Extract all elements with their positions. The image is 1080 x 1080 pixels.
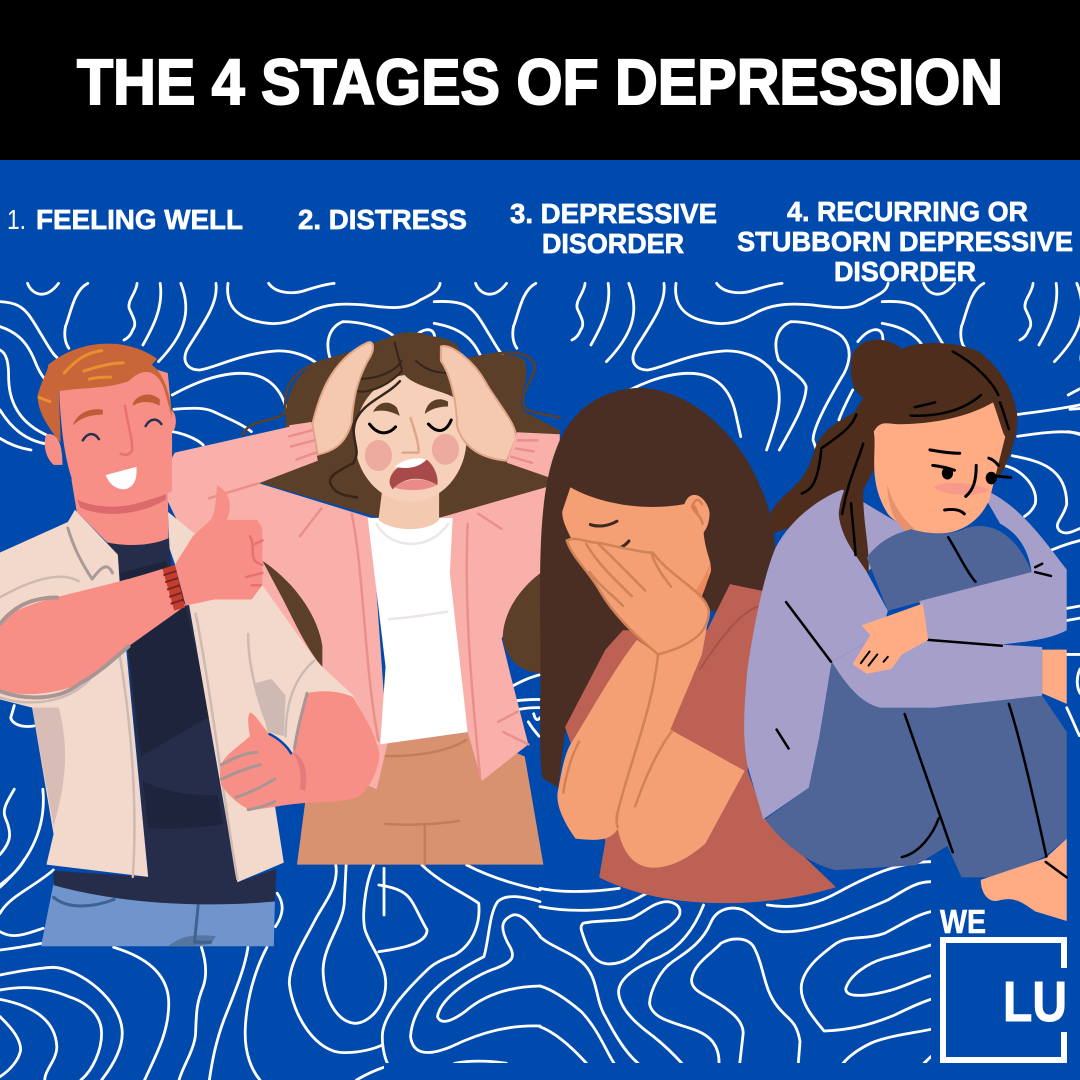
- background contour lines: [0, 283, 1080, 1080]
- blush: [933, 483, 990, 495]
- front hair strand: [839, 436, 884, 574]
- cardigan: [167, 422, 387, 789]
- hair: [770, 340, 1018, 533]
- logo frame: [943, 940, 1064, 1060]
- watch: [162, 565, 185, 610]
- brows: [73, 395, 160, 425]
- sweater body: [744, 490, 916, 819]
- header band: [0, 0, 1080, 160]
- eye marks: [590, 521, 629, 548]
- logo: We Lu: [940, 903, 1067, 1060]
- thumbs-up fist: [175, 485, 262, 606]
- hands on head: [312, 342, 516, 461]
- loose hair strands: [243, 353, 560, 434]
- foot: [981, 839, 1067, 921]
- left forearm: [557, 640, 658, 840]
- neck and face: [378, 491, 439, 529]
- eyes and brows: [369, 420, 451, 433]
- label: stage 4: DISORDER: [834, 256, 976, 287]
- label: stage 3: DISORDER: [542, 228, 684, 259]
- shirt: [565, 584, 836, 903]
- big arm: [0, 569, 186, 694]
- dark t-shirt: [54, 538, 277, 904]
- lower hand: [220, 691, 379, 810]
- figure: sad woman hugging knees: [744, 340, 1067, 921]
- neck: [695, 561, 711, 601]
- cheeks: [365, 434, 459, 471]
- figure: happy man: [0, 344, 379, 946]
- label: stage 1: 1.: [7, 204, 26, 235]
- hair: [540, 388, 776, 788]
- smile: [106, 467, 137, 489]
- hands: [567, 539, 709, 654]
- logo word: WE: WE: [940, 903, 986, 940]
- neck: [71, 479, 169, 545]
- figure: distressed woman: [167, 332, 560, 865]
- hair: [37, 344, 172, 442]
- jeans: [41, 883, 275, 946]
- jacket shading: [32, 708, 65, 826]
- eyes: [83, 420, 161, 440]
- stage labels: [7, 196, 1073, 287]
- pants: [765, 526, 1067, 877]
- label: stage 4: STUBBORN DEPRESSIVE: [737, 226, 1073, 257]
- jacket: [0, 510, 148, 877]
- label: stage 4: 4. RECURRING OR: [787, 196, 1028, 227]
- white t-shirt: [368, 518, 468, 744]
- ears: [45, 410, 176, 465]
- figure: crying woman: [540, 388, 836, 903]
- hands: [853, 604, 1067, 704]
- open mouth: [390, 459, 438, 489]
- skirt: [297, 732, 543, 865]
- sweater arms: [832, 487, 1067, 708]
- back hair: [259, 335, 560, 518]
- right forearm: [617, 616, 745, 868]
- logo word: LU: LU: [1003, 970, 1067, 1034]
- label: stage 3: 3. DEPRESSIVE: [510, 198, 717, 229]
- side hair lobes: [262, 561, 560, 673]
- face: [562, 487, 711, 630]
- cuffs: [289, 422, 560, 481]
- curly strand: [330, 381, 400, 497]
- blue masks over pattern edges: [384, 737, 1080, 1080]
- title: THE 4 STAGES OF DEPRESSION: [77, 46, 1003, 118]
- face: [874, 402, 1005, 533]
- label: stage 3: [510, 198, 717, 259]
- facial features: [930, 450, 1011, 514]
- label: stage 1: FEELING WELL: [36, 204, 243, 235]
- label: stage 4: [737, 196, 1073, 287]
- body creases: [777, 537, 1067, 877]
- fringe: [355, 332, 458, 408]
- head: [59, 361, 172, 504]
- label: stage 2: 2. DISTRESS: [298, 204, 467, 235]
